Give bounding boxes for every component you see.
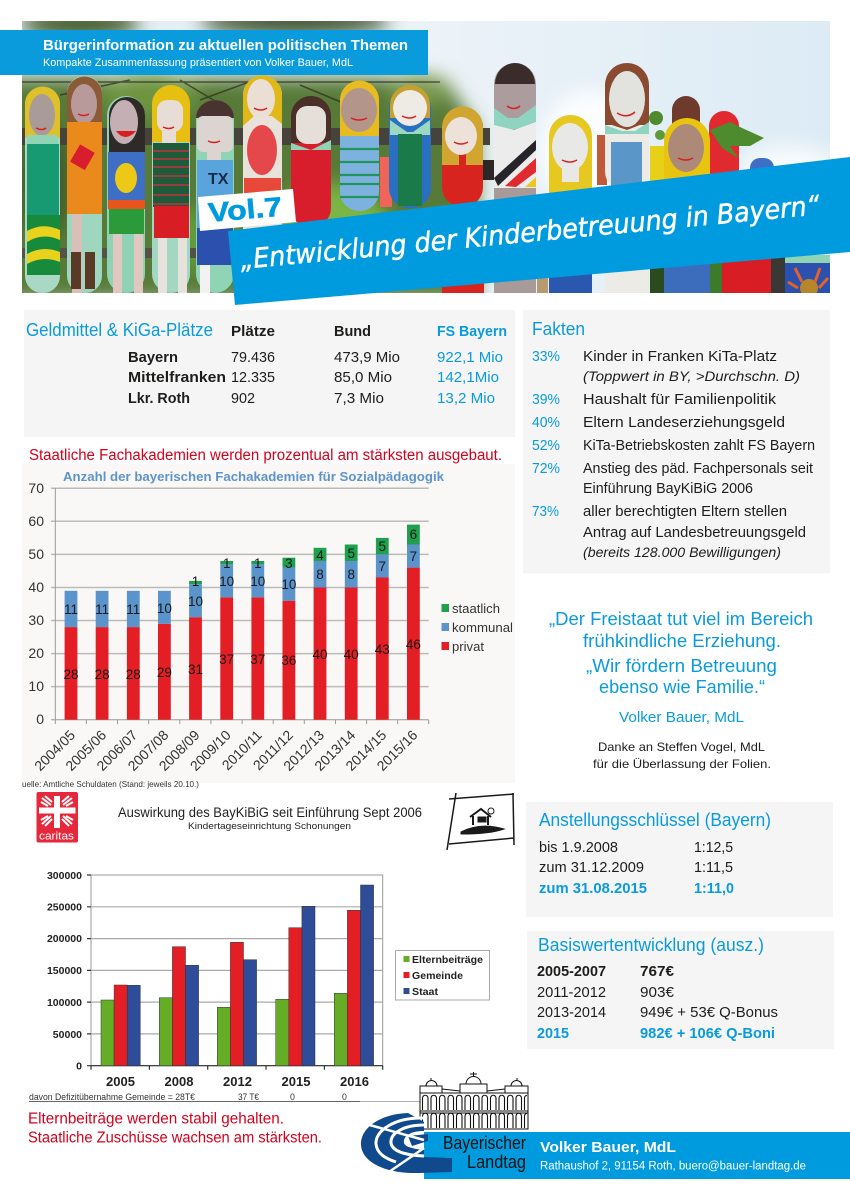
y axis labels	[47, 870, 82, 1072]
series: Elternbeiträge	[101, 993, 347, 1066]
data labels: 1	[223, 556, 230, 571]
footer bar	[424, 1132, 850, 1179]
data labels: 28	[126, 667, 141, 682]
lower poles below the banner	[442, 255, 830, 293]
percentages: 73%	[532, 503, 559, 520]
data labels: 43	[375, 642, 390, 657]
x axis labels	[106, 1074, 369, 1089]
footnote: Defizitübernahme: 0	[342, 1092, 347, 1102]
chart legend: Staat	[412, 986, 438, 998]
figure 13	[597, 63, 649, 193]
chart heading: Auswirkung BayKiBiG: Auswirkung des BayKiBiG seit Einführung Sept 2006	[118, 805, 422, 820]
table header: Plätze	[231, 323, 275, 340]
chart heading: Auswirkung BayKiBiG	[118, 805, 422, 832]
icon: Landtag emblem	[361, 1113, 452, 1174]
y axis labels: 0	[36, 711, 44, 727]
key rows: zum 31.08.2015	[539, 880, 647, 897]
value rows: 949€ + 53€ Q-Bonus	[640, 1004, 778, 1021]
series: Staat	[127, 885, 374, 1066]
row labels	[128, 349, 226, 407]
value rows: 2005-2007	[537, 963, 606, 980]
data labels: 10	[157, 601, 172, 616]
red statement: Elternbeiträge: Elternbeiträge werden stabil gehalten.	[28, 1110, 284, 1128]
y axis labels: 10	[28, 678, 44, 694]
data labels: 28	[95, 667, 110, 682]
data labels: 28	[63, 667, 79, 682]
figure 14 and poles behind	[649, 96, 764, 181]
value rows: 2015	[537, 1025, 569, 1042]
row labels: Bayern	[128, 349, 178, 366]
x axis labels: 2004/05	[31, 727, 78, 774]
chart legend: kommunal	[452, 620, 513, 635]
figure 9	[380, 85, 431, 208]
data labels: 40	[344, 647, 359, 662]
y axis labels: 200000	[47, 933, 82, 945]
key rows: zum 31.12.2009	[539, 859, 644, 876]
figure 12	[549, 115, 592, 193]
data labels: 11	[95, 602, 109, 617]
x axis labels: 2015	[282, 1074, 310, 1089]
data labels: 29	[157, 665, 172, 680]
x axis labels: 2014/15	[342, 727, 390, 774]
x axis labels: 2008/09	[156, 727, 203, 774]
x axis labels: 2016	[340, 1074, 369, 1089]
data labels: 37	[250, 652, 265, 667]
value rows: 767€	[640, 963, 675, 980]
x axis labels: 2005/06	[62, 727, 109, 774]
panel: Fakten	[523, 310, 830, 574]
footnote: Defizitübernahme	[29, 1092, 422, 1102]
header title: Bürgerinformation zu aktuellen politischen Themen	[43, 37, 408, 54]
y axis labels: 70	[28, 480, 44, 496]
table values: 12.335	[231, 369, 275, 386]
series: privat	[65, 568, 420, 720]
panel: Basiswertentwicklung	[527, 931, 834, 1049]
row labels: Mittelfranken	[128, 369, 226, 386]
data labels: 40	[312, 647, 328, 662]
data labels: 7	[410, 549, 417, 564]
data labels: 46	[406, 637, 421, 652]
data labels: 1	[192, 574, 199, 589]
x axis labels	[31, 727, 421, 774]
panel: Geldmittel und KiGa-Plätze	[24, 310, 515, 437]
figure 2	[67, 76, 102, 293]
thanks note: für die Überlassung der Folien.	[593, 757, 771, 771]
x axis labels: 2005	[106, 1074, 135, 1089]
Landtag wordmark	[443, 1133, 526, 1172]
figure 3	[107, 96, 145, 293]
data labels: 8	[347, 567, 355, 582]
chart legend: staatlich	[452, 601, 500, 616]
chart legend: Gemeinde	[412, 970, 463, 982]
figure 8	[340, 80, 379, 211]
data labels: 36	[281, 653, 296, 668]
data labels: 8	[316, 567, 324, 582]
table values: 85,0 Mio	[334, 369, 392, 386]
figure 10	[442, 106, 483, 207]
red statement: Elternbeiträge: Staatliche Zuschüsse wachsen am stärksten.	[28, 1130, 322, 1146]
fact descriptions	[583, 348, 815, 560]
chart legend	[442, 601, 513, 654]
x axis labels: 2007/08	[124, 727, 172, 774]
data labels: 10	[250, 574, 265, 589]
percentages	[532, 348, 560, 520]
stacked bar chart: Fachakademien	[22, 464, 515, 783]
header bar	[0, 30, 428, 75]
thanks note: Danke an Steffen Vogel, MdL	[598, 740, 765, 754]
chart title: Anzahl der bayerischen Fachakademien für Sozialpädagogik	[63, 469, 445, 484]
panel heading: Geldmittel & KiGa-Plätze	[26, 320, 213, 340]
y axis labels: 250000	[47, 902, 82, 914]
y axis labels: 20	[28, 645, 44, 661]
quote	[549, 609, 813, 726]
value rows	[537, 963, 778, 1042]
table values: 922,1 Mio	[437, 349, 503, 366]
data labels	[63, 527, 421, 682]
footnote: Defizitübernahme: 37 T€	[238, 1092, 259, 1102]
panel heading: Basiswertentwicklung (ausz.)	[538, 935, 764, 955]
red statement: Fachakademien: Staatliche Fachakademien werden prozentual am stärksten ausgebaut.	[29, 447, 502, 464]
y axis labels: 0	[76, 1060, 82, 1072]
y axis labels	[28, 480, 44, 727]
footer name: Volker Bauer, MdL	[540, 1139, 676, 1156]
fact descriptions: Kinder in Franken KiTa-Platz	[583, 348, 777, 365]
x axis labels: 2011/12	[250, 727, 296, 773]
footnote: Defizitübernahme: davon Defizitübernahme Gemeinde = 28T€	[29, 1092, 195, 1102]
Landtag wordmark: Landtag	[467, 1152, 526, 1172]
value rows: 2011-2012	[537, 984, 606, 1001]
fact descriptions: Eltern Landeserziehungsgeld	[583, 414, 785, 431]
data labels: 3	[285, 556, 293, 571]
data labels: 5	[379, 539, 386, 554]
table header: FS Bayern	[437, 323, 507, 340]
footer address: Rathaushof 2, 91154 Roth, buero@bauer-landtag.de	[540, 1160, 806, 1172]
key rows	[539, 839, 734, 897]
table values: 142,1Mio	[437, 369, 499, 386]
data labels: 7	[379, 559, 386, 574]
data labels: 6	[410, 527, 417, 542]
series: kommunal	[65, 544, 420, 627]
source note: uelle: Amtliche Schuldaten (Stand: jeweils 20.10.)	[22, 779, 199, 789]
y axis labels: 150000	[47, 965, 82, 977]
footnote: Defizitübernahme: 0	[290, 1092, 295, 1102]
value rows: 2013-2014	[537, 1004, 606, 1021]
data labels: 5	[347, 546, 355, 561]
data labels: 10	[219, 574, 234, 589]
data labels: 11	[64, 602, 78, 617]
key rows: 1:12,5	[694, 839, 733, 856]
banner title text: „Entwicklung der Kinderbetreuung in Bayern“	[239, 190, 822, 276]
figure 11	[494, 63, 536, 200]
quote: „Wir fördern Betreuung	[586, 656, 777, 676]
x axis labels: 2012/13	[280, 727, 327, 774]
x axis labels: 2013/14	[311, 727, 358, 774]
data labels: 31	[188, 662, 203, 677]
panel: Anstellungsschlüssel	[526, 802, 833, 917]
title banner	[228, 157, 850, 305]
key rows: 1:11,0	[694, 880, 734, 897]
grouped bar chart: Finanzierung Schonungen	[47, 870, 490, 1089]
red statement: Elternbeiträge	[28, 1110, 322, 1146]
Fakten heading: Fakten	[532, 319, 585, 339]
icon: caritas logo	[36, 792, 78, 842]
icon: hand-drawn house	[447, 793, 514, 850]
y axis labels: 300000	[47, 870, 82, 882]
figure 7	[291, 96, 331, 227]
percentages: 40%	[532, 414, 560, 431]
series: staatlich	[189, 525, 420, 584]
icon: Landtag building	[420, 1072, 528, 1129]
x axis labels: 2015/16	[373, 727, 421, 774]
key rows: 1:11,5	[694, 859, 733, 876]
y axis labels: 40	[28, 579, 44, 595]
data labels: 4	[316, 548, 324, 563]
table header	[231, 323, 507, 340]
chart legend: privat	[452, 639, 484, 654]
x axis labels: 2009/10	[187, 727, 234, 774]
data labels: 10	[188, 594, 203, 609]
data labels: 10	[281, 577, 296, 592]
x axis labels: 2006/07	[93, 727, 141, 774]
key rows: bis 1.9.2008	[539, 839, 618, 856]
percentages: 72%	[532, 460, 560, 477]
y axis labels: 50	[28, 546, 44, 562]
value rows: 982€ + 106€ Q-Boni	[640, 1025, 775, 1042]
fact descriptions: Haushalt für Familienpolitik	[583, 391, 777, 408]
figure 4	[152, 85, 190, 293]
y axis labels: 50000	[53, 1029, 82, 1041]
quote: „Der Freistaat tut viel im Bereich	[549, 609, 813, 629]
quote: ebenso wie Familie.“	[599, 677, 765, 697]
value rows: 903€	[640, 984, 675, 1001]
x axis labels: 2008	[165, 1074, 193, 1089]
table values: 79.436	[231, 349, 275, 366]
table values: 902	[231, 390, 255, 407]
quote: frühkindliche Erziehung.	[583, 631, 781, 651]
fact descriptions: aller berechtigten Eltern stellen	[583, 503, 787, 520]
data labels: 37	[219, 652, 234, 667]
header subtitle: Kompakte Zusammenfassung präsentiert von Volker Bauer, MdL	[43, 57, 353, 69]
fact descriptions: Einführung BayKiBiG 2006	[583, 480, 753, 497]
thanks note	[593, 740, 771, 771]
percentages: 39%	[532, 391, 560, 408]
table values: 7,3 Mio	[334, 390, 384, 407]
figure 5	[196, 100, 234, 293]
data labels: 11	[126, 602, 140, 617]
fact descriptions: Antrag auf Landesbetreuungsgeld	[583, 524, 806, 541]
fact descriptions: Anstieg des päd. Fachpersonals seit	[583, 460, 814, 477]
chart legend	[396, 950, 490, 1000]
Landtag wordmark: Bayerischer	[443, 1133, 526, 1153]
x axis labels: 2012	[223, 1074, 252, 1089]
series: Gemeinde	[114, 910, 360, 1066]
table header: Bund	[334, 323, 371, 340]
y axis labels: 60	[28, 513, 44, 529]
hero photo: painted wooden children fence	[22, 21, 830, 293]
quote author: Volker Bauer, MdL	[619, 709, 744, 726]
chart subheading: Kindertageseinrichtung Schonungen	[188, 821, 351, 832]
y axis labels: 100000	[47, 997, 82, 1009]
panel heading: Anstellungsschlüssel (Bayern)	[539, 810, 771, 830]
icon: caritas logo: caritas	[39, 830, 75, 842]
x axis labels: 2010/11	[219, 727, 265, 773]
figure 1	[25, 86, 60, 293]
percentages: 33%	[532, 348, 560, 365]
table values	[231, 349, 503, 407]
volume badge	[198, 189, 296, 231]
figure 5: TX	[208, 171, 229, 188]
y axis labels: 30	[28, 612, 44, 628]
data labels: 1	[254, 556, 262, 571]
chart legend: Elternbeiträge	[412, 954, 483, 966]
volume number: Vol.7	[207, 192, 283, 228]
fact descriptions: KiTa-Betriebskosten zahlt FS Bayern	[583, 437, 815, 454]
table values: 13,2 Mio	[437, 390, 495, 407]
fact descriptions: (Toppwert in BY, >Durchschn. D)	[583, 368, 800, 384]
percentages: 52%	[532, 437, 560, 454]
table values: 473,9 Mio	[334, 349, 400, 366]
figure 6	[243, 76, 282, 230]
fact descriptions: (bereits 128.000 Bewilligungen)	[583, 544, 781, 560]
row labels: Lkr. Roth	[128, 390, 190, 407]
